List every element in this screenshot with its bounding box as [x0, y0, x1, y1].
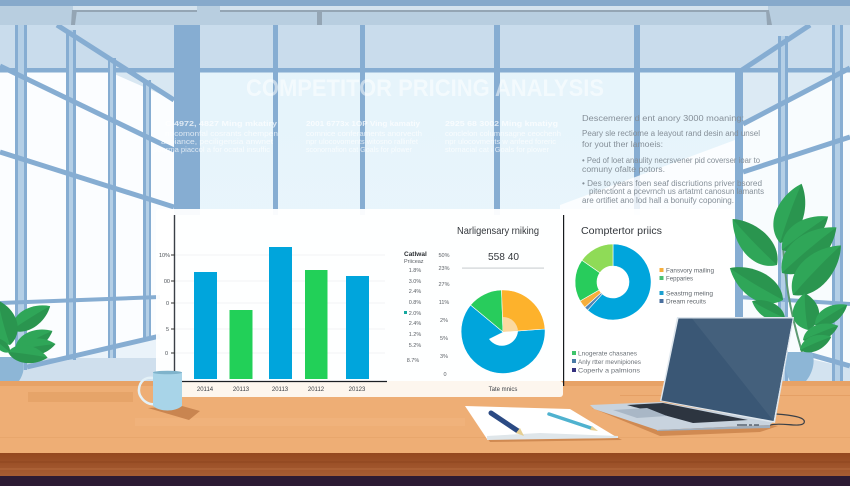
bar chart: 00: [164, 279, 170, 285]
description text block: comuny ofalte potors.: [582, 165, 665, 174]
description text block: Peary sle rectiome a leayout rand desin and unsel: [582, 129, 760, 138]
middle legend: 2.0%: [409, 311, 421, 317]
donut legend: Fansvory mailing: [666, 268, 714, 274]
middle legend: 1.8%: [409, 268, 421, 274]
bar chart: 20113: [233, 387, 250, 393]
middle legend: 2.4%: [409, 321, 421, 327]
donut chart: [575, 244, 651, 320]
bar chart: 20113: [272, 387, 289, 393]
middle legend: 2%: [440, 318, 448, 324]
competitor chart title: Comptertor priics: [581, 225, 662, 237]
middle chart rule: [462, 268, 544, 269]
text column 3: stornacial cat i Goals for plower: [445, 145, 549, 154]
lower legend: [572, 350, 642, 374]
description text block: • Des to years foen seaf discriutions priver bsored: [582, 179, 762, 188]
text column 1: [153, 119, 278, 154]
middle legend: 5%: [440, 336, 448, 342]
text column 2: 2001 6773x 1OP Ving kamatiy: [306, 119, 421, 128]
panel: charts board: [156, 209, 735, 397]
ceiling with light fixtures: [0, 0, 850, 25]
middle legend: 3%: [440, 354, 448, 360]
donut legend: Dream recuits: [666, 298, 707, 306]
middle chart title: Narligensary rniking: [457, 225, 539, 237]
desk: [0, 381, 850, 486]
description text block: • Ped of loet anaulity necrsvener pid coverser ioar to: [582, 156, 761, 165]
middle legend: 0: [443, 372, 447, 378]
panel bottom strip over desk: [156, 381, 563, 397]
text column 3: [445, 119, 561, 154]
bar chart: 20114: [197, 387, 214, 393]
description text block: for yout ther lamoeis:: [582, 140, 663, 149]
text column 1: poorma piaccol a for ocatal insuffic: [153, 145, 270, 154]
middle legend: 1.2%: [409, 332, 421, 338]
text column 3: 2925 68 3002 Ming kmatiyg: [445, 119, 558, 128]
middle legend: 27%: [438, 282, 450, 288]
middle legend: Catlwal: [404, 251, 427, 258]
divider: [563, 215, 564, 386]
middle legend: [404, 251, 450, 378]
title: COMPETITOR PRICING ANALYSIS: [246, 75, 604, 102]
description text block: are ortifiet ano lod hall a bonuify coponing.: [582, 196, 734, 205]
bar chart: 0: [165, 351, 168, 357]
bar chart: 10%: [159, 253, 170, 259]
bar chart: 5: [166, 327, 169, 333]
left plant: [0, 297, 57, 381]
donut legend: [660, 268, 714, 306]
middle legend: 50%: [438, 253, 450, 259]
description text block: Descemerer d ent anory 3000 moaning:: [582, 114, 744, 123]
middle legend: 11%: [439, 300, 449, 306]
icon: coffee mug: [139, 371, 200, 420]
description text block: [582, 114, 764, 205]
middle legend: 23%: [438, 266, 450, 272]
pie chart: [461, 290, 545, 374]
text column 1: aspiance, peciligensia anwnet: [161, 137, 274, 146]
middle legend: 3.0%: [409, 279, 421, 285]
middle legend: 5.2%: [409, 343, 421, 349]
lower legend: Coperlv a palmions: [578, 368, 641, 374]
middle chart value: 558 40: [488, 251, 519, 263]
text column 1: C 4972, 4827 Ming mkatiry: [165, 119, 278, 128]
text column 2: [306, 119, 422, 154]
middle legend: 2.4%: [409, 289, 421, 295]
bar chart: 20123: [349, 387, 366, 393]
text column 2: sconornafion cat Goals for plower: [306, 145, 412, 154]
text column 3: conclelon columnsagne ceochenh: [445, 129, 561, 138]
text column 2: comnice conferaments anorvecth: [306, 129, 422, 138]
donut legend: Fepparies: [666, 276, 694, 282]
bar chart: [159, 215, 387, 393]
text column 1: nt comonfal cosrants chempen: [165, 129, 278, 138]
description text block: pitenctiont a pcevrnch us artatmt canosun lamants: [589, 187, 764, 196]
lower legend: Lnogerate chasanes: [578, 350, 638, 358]
lower legend: Anly rtter mevnipiones: [578, 359, 642, 366]
text column 2: npr ulocovoments witosno rallinfet: [306, 137, 419, 146]
right panel background: [560, 140, 735, 381]
icon: notebook and pens: [465, 406, 622, 442]
middle legend: 8.7%: [407, 358, 419, 364]
pie caption: Tate mnics: [489, 387, 517, 393]
donut legend: Seastrng meiing: [666, 290, 713, 298]
text column 3: npr ulocovments w anfeed foreric: [445, 137, 556, 146]
bar chart: 20112: [308, 387, 325, 393]
icon: laptop: [590, 317, 804, 436]
right plant: [722, 179, 850, 381]
middle legend: Priiceaz: [404, 259, 424, 265]
middle legend: 0.8%: [409, 300, 421, 306]
bar chart: 0: [166, 301, 169, 307]
